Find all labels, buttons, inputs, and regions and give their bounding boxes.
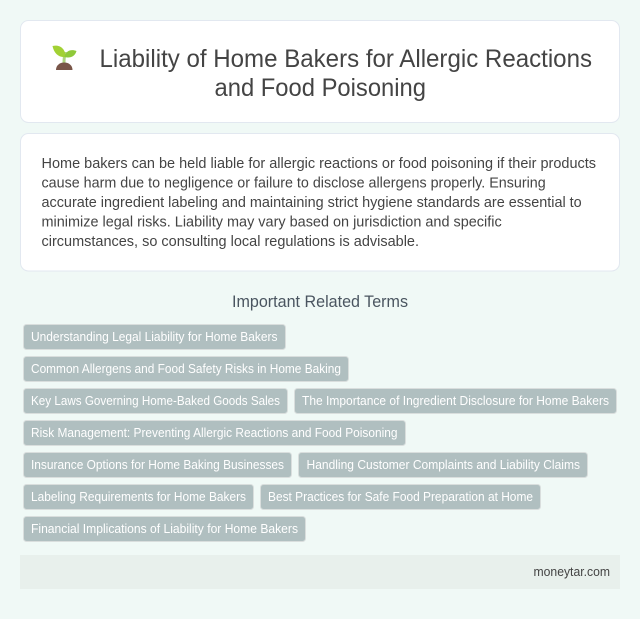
- panel: header: [20, 20, 620, 122]
- tag: common allergens: [24, 356, 348, 382]
- text block: summary paragraph: accurate ingredient labeling and maintaining strict hygiene standards are essential to: [42, 194, 582, 211]
- tag: best practices: [260, 484, 540, 510]
- text block: summary paragraph: circumstances, so consulting local regulations is advisable.: [42, 233, 419, 250]
- tags: related terms: [24, 324, 616, 542]
- tag: insurance options: [24, 452, 292, 478]
- text block: summary paragraph: [42, 155, 596, 250]
- tag: common allergens: Common Allergens and Food Safety Risks in Home Baking: [31, 361, 341, 376]
- title: [100, 45, 592, 102]
- tag: risk management: Risk Management: Preventing Allergic Reactions and Food Poisoning: [31, 425, 398, 440]
- text block: summary paragraph: Home bakers can be held liable for allergic reactions or food poisoning if their products: [42, 155, 596, 172]
- tag: financial implications: [24, 516, 306, 542]
- icon: seedling: [52, 46, 76, 70]
- tag: key laws: [24, 388, 288, 414]
- tag: customer complaints: Handling Customer Complaints and Liability Claims: [306, 457, 580, 472]
- tag: insurance options: Insurance Options for Home Baking Businesses: [31, 457, 284, 472]
- tag: understanding legal liability: [24, 324, 286, 350]
- footer: [20, 555, 620, 589]
- text block: summary paragraph: minimize legal risks. Liability may vary based on jurisdiction and specific: [42, 214, 502, 230]
- tag: labeling requirements: [24, 484, 254, 510]
- tag: ingredient disclosure: [294, 388, 616, 414]
- tag: best practices: Best Practices for Safe Food Preparation at Home: [268, 489, 533, 504]
- tag: customer complaints: [298, 452, 588, 478]
- tag: ingredient disclosure: The Importance of Ingredient Disclosure for Home Bakers: [302, 393, 609, 408]
- text block: summary paragraph: cause harm due to negligence or failure to disclose allergens properly. Ensuring: [42, 174, 546, 192]
- heading: important related terms: Important Related Terms: [232, 293, 408, 311]
- panel: summary: [20, 134, 620, 271]
- tag: risk management: [24, 420, 406, 446]
- tag: understanding legal liability: Understanding Legal Liability for Home Bakers: [31, 329, 278, 344]
- tag: financial implications: Financial Implications of Liability for Home Bakers: [31, 521, 298, 536]
- footer: moneytar.com: [534, 565, 610, 579]
- title: and Food Poisoning: [214, 74, 426, 102]
- tag: labeling requirements: Labeling Requirements for Home Bakers: [31, 489, 246, 504]
- title: Liability of Home Bakers for Allergic Reactions: [100, 45, 592, 73]
- tag: key laws: Key Laws Governing Home-Baked Goods Sales: [31, 393, 280, 408]
